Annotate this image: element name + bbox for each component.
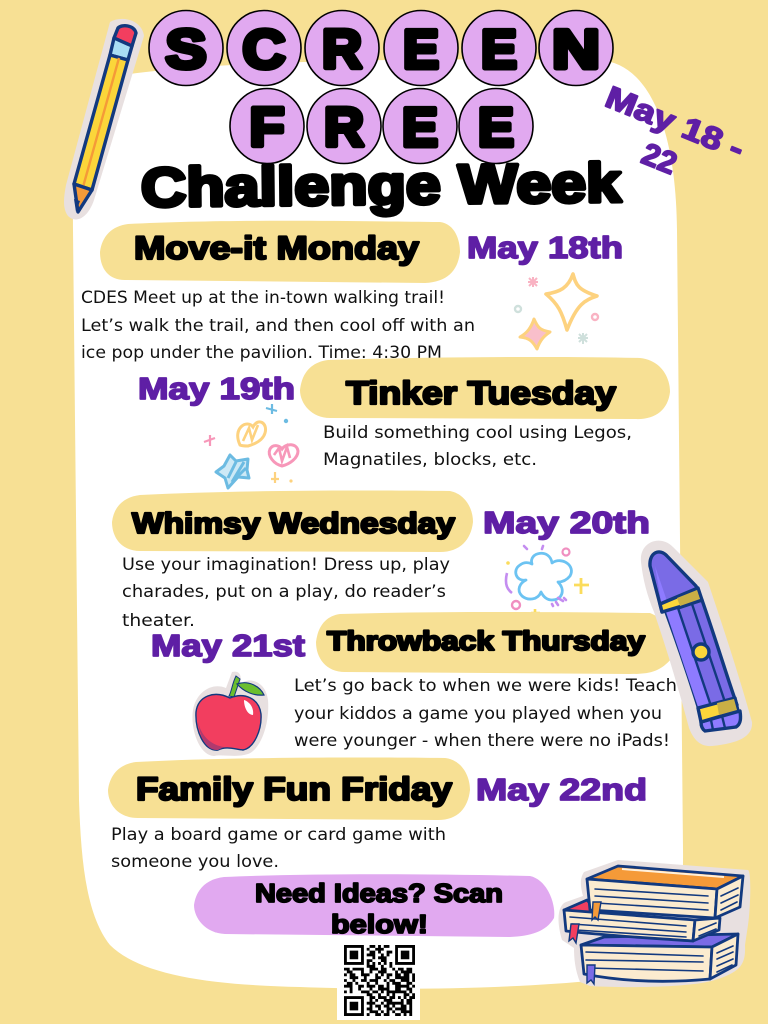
panel: Monday: [81, 221, 623, 363]
Monday body text: ice pop under the pavilion. Time: 4:30 PM: [81, 343, 442, 363]
callout: need ideas pill: [194, 874, 554, 939]
Tuesday date: May 19th: [138, 371, 295, 406]
Friday date: May 22nd: [476, 772, 647, 807]
Friday body text: [111, 825, 446, 872]
Thursday body text: Let’s go back to when we were kids! Teach: [294, 676, 677, 696]
Monday pill: [100, 221, 460, 283]
Thursday body text: [294, 676, 677, 751]
date range sticker: [586, 79, 749, 203]
Wednesday heading: Whimsy Wednesday: [132, 508, 455, 540]
icon: sparkles: [515, 274, 598, 349]
icon: stack of books: [559, 860, 750, 987]
Wednesday pill: [112, 490, 473, 552]
title: SCREEN letter circles: S: [166, 18, 206, 80]
Wednesday body text: [122, 555, 450, 631]
icon: apple: [192, 672, 268, 756]
title: SCREEN letter circles: N: [552, 18, 600, 80]
callout: need ideas pill: Need Ideas? Scan: [255, 878, 503, 908]
title: SCREEN letter circles: E: [403, 18, 439, 80]
Monday body text: Let’s walk the trail, and then cool off with an: [81, 316, 475, 336]
title: SCREEN letter circles: R: [322, 18, 362, 80]
panel: Tuesday: [138, 357, 670, 470]
title: FREE letter circles: R: [324, 96, 364, 158]
panel: Friday: [108, 757, 647, 872]
Friday body text: someone you love.: [111, 852, 279, 872]
title: SCREEN letter circles: C: [242, 18, 286, 80]
Friday pill: [108, 757, 470, 820]
Wednesday body text: charades, put on a play, do reader’s: [122, 582, 446, 602]
Thursday body text: were younger - when there were no iPads!: [294, 731, 670, 751]
Tuesday body text: [323, 423, 632, 470]
icon: doodle hearts and star: [204, 404, 298, 488]
Monday body text: CDES Meet up at the in-town walking trail!: [81, 288, 445, 308]
date range sticker: 22: [637, 136, 682, 181]
Wednesday body text: theater.: [122, 611, 195, 631]
Thursday heading: Throwback Thursday: [327, 626, 645, 656]
callout: need ideas pill: below!: [331, 909, 428, 939]
Wednesday body text: Use your imagination! Dress up, play: [122, 555, 450, 575]
Monday heading: Move-it Monday: [134, 230, 419, 266]
title: FREE letter circles: E: [478, 96, 514, 158]
title: SCREEN letter circles: [149, 10, 613, 86]
date range sticker: May 18 -: [601, 79, 749, 166]
title: FREE letter circles: [230, 88, 533, 164]
Friday heading: Family Fun Friday: [136, 771, 452, 807]
Wednesday date: May 20th: [483, 505, 650, 540]
panel: Wednesday: [112, 490, 650, 631]
Tuesday body text: Magnatiles, blocks, etc.: [323, 450, 537, 470]
title: FREE letter circles: F: [250, 96, 284, 158]
icon: pencil: [64, 19, 144, 219]
Thursday date: May 21st: [151, 628, 305, 663]
icon: crayon: [641, 541, 752, 746]
Tuesday pill: [300, 357, 670, 419]
Tuesday heading: Tinker Tuesday: [346, 375, 616, 411]
Tuesday body text: Build something cool using Legos,: [323, 423, 632, 443]
Thursday body text: your kiddos a game you played when you: [294, 704, 662, 724]
panel: white rounded paper: [73, 59, 683, 989]
QR code: [337, 942, 420, 1020]
Monday date: May 18th: [467, 230, 623, 265]
Thursday pill: [316, 612, 673, 674]
panel: Thursday: [151, 612, 677, 751]
title: Challenge Week: Challenge Week: [141, 151, 622, 219]
icon: doodle flower: [506, 546, 589, 618]
Friday body text: Play a board game or card game with: [111, 825, 446, 845]
title: FREE letter circles: E: [402, 96, 438, 158]
title: SCREEN letter circles: E: [481, 18, 517, 80]
Monday body text: [81, 288, 475, 363]
